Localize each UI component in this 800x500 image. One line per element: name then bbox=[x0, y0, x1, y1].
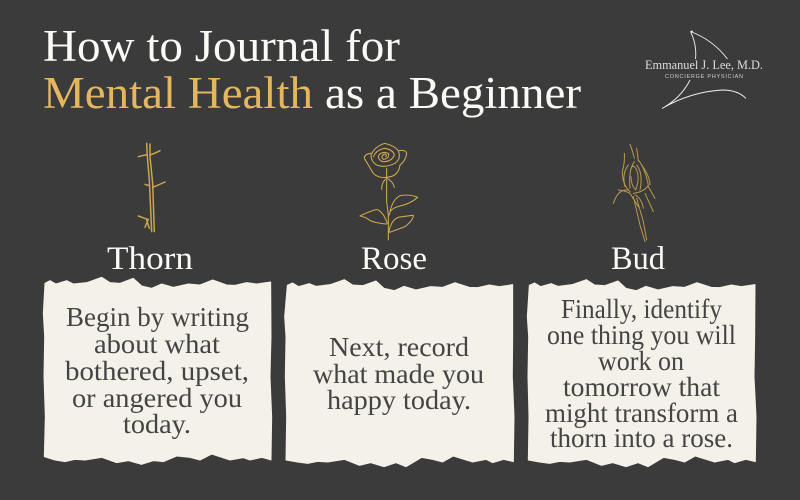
icon: thorn bbox=[138, 143, 165, 232]
logo: Emmanuel J. Lee, M.D. bbox=[645, 58, 763, 72]
text: thorn bbox=[65, 302, 249, 439]
text: rose: happy today. bbox=[327, 385, 471, 415]
panel: rose bbox=[285, 280, 514, 467]
logo: CONCIERGE PHYSICIAN bbox=[665, 74, 743, 80]
text: rose bbox=[313, 332, 485, 415]
paper: thorn bbox=[43, 277, 272, 464]
icon: rose bbox=[360, 143, 418, 240]
text: thorn: bothered, upset, bbox=[65, 356, 249, 386]
paper: rose bbox=[285, 280, 514, 467]
heading: Thorn: Thorn bbox=[107, 241, 193, 277]
text: bud bbox=[545, 294, 738, 453]
panel: thorn bbox=[43, 277, 272, 464]
text: bud: thorn into a rose. bbox=[550, 423, 733, 453]
text: rose: what made you bbox=[313, 359, 485, 389]
text: bud: might transform a bbox=[545, 398, 738, 428]
panel: bud bbox=[527, 280, 756, 467]
title: How to Journal for bbox=[43, 21, 400, 71]
heading: Bud: Bud bbox=[611, 241, 665, 277]
paper: bud bbox=[527, 280, 756, 467]
title: Mental Health bbox=[43, 68, 313, 118]
text: bud: Finally, identify bbox=[561, 294, 722, 324]
text: thorn: about what bbox=[94, 329, 221, 359]
title bbox=[43, 21, 581, 118]
text: rose: Next, record bbox=[329, 332, 470, 362]
text: thorn: today. bbox=[123, 409, 191, 439]
text: thorn: Begin by writing bbox=[66, 302, 249, 332]
text: bud: work on bbox=[598, 346, 684, 376]
text: thorn: or angered you bbox=[72, 383, 243, 413]
heading: Rose: Rose bbox=[361, 241, 427, 277]
text: bud: tomorrow that bbox=[563, 372, 720, 402]
icon: bud bbox=[613, 144, 655, 242]
text: bud: one thing you will bbox=[547, 320, 736, 350]
title: as a Beginner bbox=[325, 68, 581, 118]
logo bbox=[645, 31, 763, 108]
